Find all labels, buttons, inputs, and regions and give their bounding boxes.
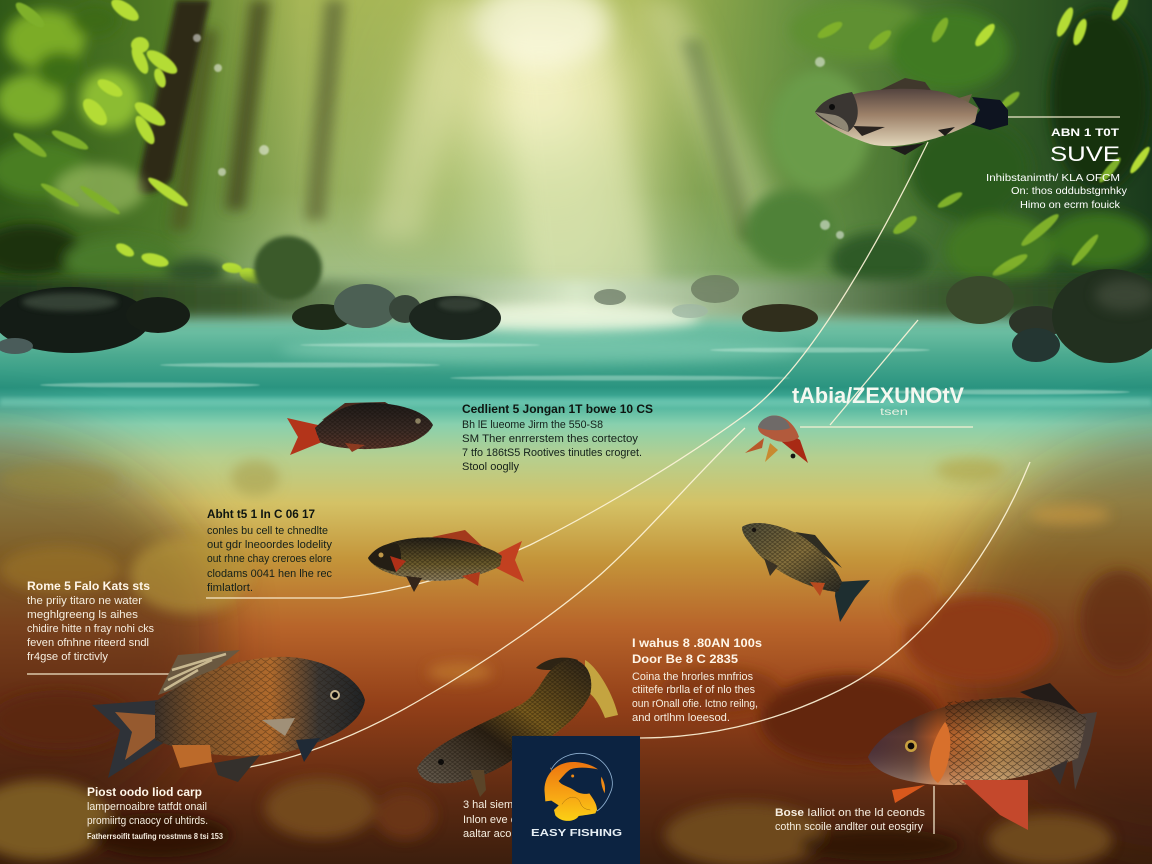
- foliage masses: [0, 0, 1150, 288]
- text block: bottom left: lampernoaibre tatfdt onail: [87, 801, 207, 813]
- text block: centre right label: tAbia/ZEXUNOtV: [792, 383, 964, 408]
- text block: lower centre right: Door Be 8 C 2835: [632, 652, 738, 666]
- text block: left: the priiy titaro ne water: [27, 595, 142, 607]
- text block: centre: Stool ooglly: [462, 461, 519, 473]
- text block: left: feven ofnhne riteerd sndl: [27, 637, 149, 649]
- text block: bottom left: Fatherrsoifit taufing rosstmns 8 tsi 153: [87, 832, 224, 841]
- text block: top right: Himo on ecrm fouick: [1020, 199, 1121, 211]
- text block: below arowana: Inlon eve cofite: [463, 814, 537, 826]
- text block: top right: SUVE: [1050, 143, 1120, 166]
- text block: left: meghlgreeng ls aihes: [27, 609, 139, 621]
- text block: centre: 7 tfo 186tS5 Rootives tinutles crogret.: [462, 447, 642, 459]
- text block: middle left: Abht t5 1 In C 06 17: [207, 507, 315, 521]
- text block: bottom right: Bose Ialliot on the ld ceonds: [775, 807, 926, 819]
- text block: lower centre right: oun rOnall ofie. Ictno reilng,: [632, 698, 758, 710]
- text block: middle left: out gdr lneoordes lodelity: [207, 539, 332, 551]
- logo: Easy Fishing: [512, 736, 640, 864]
- text block: bottom right: [775, 807, 926, 833]
- text block: centre: SM Ther enrrerstem thes cortectoy: [462, 433, 639, 445]
- text block: middle left: out rhne chay creroes elore: [207, 553, 332, 565]
- icon: fish emblem: [545, 753, 612, 821]
- river water background: [0, 280, 1152, 864]
- text block: lower centre right: I wahus 8 .80AN 100s: [632, 636, 762, 650]
- text block: left: [27, 579, 154, 663]
- fish: top right silver carp: [815, 78, 1008, 155]
- fish: red-finned common carp: [868, 683, 1097, 830]
- text block: top right: ABN 1 T0T: [1051, 127, 1119, 139]
- fish: gold red-finned fish: [368, 530, 524, 592]
- text block: bottom left: [87, 785, 224, 841]
- text block: left: chidire hitte n fray nohi cks: [27, 623, 154, 635]
- text block: lower centre right: and ortlhm loeesod.: [632, 712, 730, 724]
- text block: centre: Bh lE lueome Jirm the 550-S8: [462, 419, 603, 431]
- text block: below arowana: [463, 799, 540, 840]
- fish: large orange carp: [92, 650, 365, 782]
- fish: olive diving fish: [742, 523, 870, 622]
- fish: dark red-tailed fish: [287, 402, 433, 455]
- fish: arowana: [417, 658, 618, 797]
- text block: middle left: fimlatlort.: [207, 582, 253, 594]
- text block: left: Rome 5 Falo Kats sts: [27, 579, 150, 593]
- text block: lower centre right: [632, 636, 762, 724]
- text block: top right: [986, 127, 1128, 211]
- text block: middle left: clodams 0041 hen lhe rec: [207, 568, 332, 580]
- text block: top right: On: thos oddubstgmhky: [1011, 185, 1128, 197]
- text block: centre right label: tsen: [880, 407, 908, 418]
- connector lines: [27, 117, 1120, 834]
- text block: centre: Cedlient 5 Jongan 1T bowe 10 CS: [462, 402, 653, 416]
- text block: centre: [462, 402, 653, 473]
- text block: lower centre right: Coina the hrorles mnfrios: [632, 671, 753, 683]
- text block: top right: Inhibstanimth/ KLA OFCM: [986, 172, 1120, 184]
- text block: left: fr4gse of tirctivly: [27, 651, 109, 663]
- text block: below arowana: aaltar aco cnes: [463, 828, 538, 840]
- text block: bottom right: cothn scoile andlter out eosgiry: [775, 821, 923, 833]
- text block: middle left: [207, 507, 332, 594]
- logo wordmark: EASY FISHING: [531, 827, 622, 839]
- shoreline rocks: [0, 236, 1152, 363]
- text block: below arowana: 3 hal siem natlo: [463, 799, 540, 811]
- forest background: [0, 0, 1152, 320]
- text block: middle left: conles bu cell te chnedlte: [207, 525, 328, 537]
- text block: bottom left: Piost oodo Iiod carp: [87, 785, 202, 799]
- text block: lower centre right: ctiitefe rbrlla ef of nlo thes: [632, 684, 755, 696]
- text block: bottom left: promiirtg cnaocy of uhtirds.: [87, 815, 208, 827]
- fish: small red fish: [745, 416, 808, 463]
